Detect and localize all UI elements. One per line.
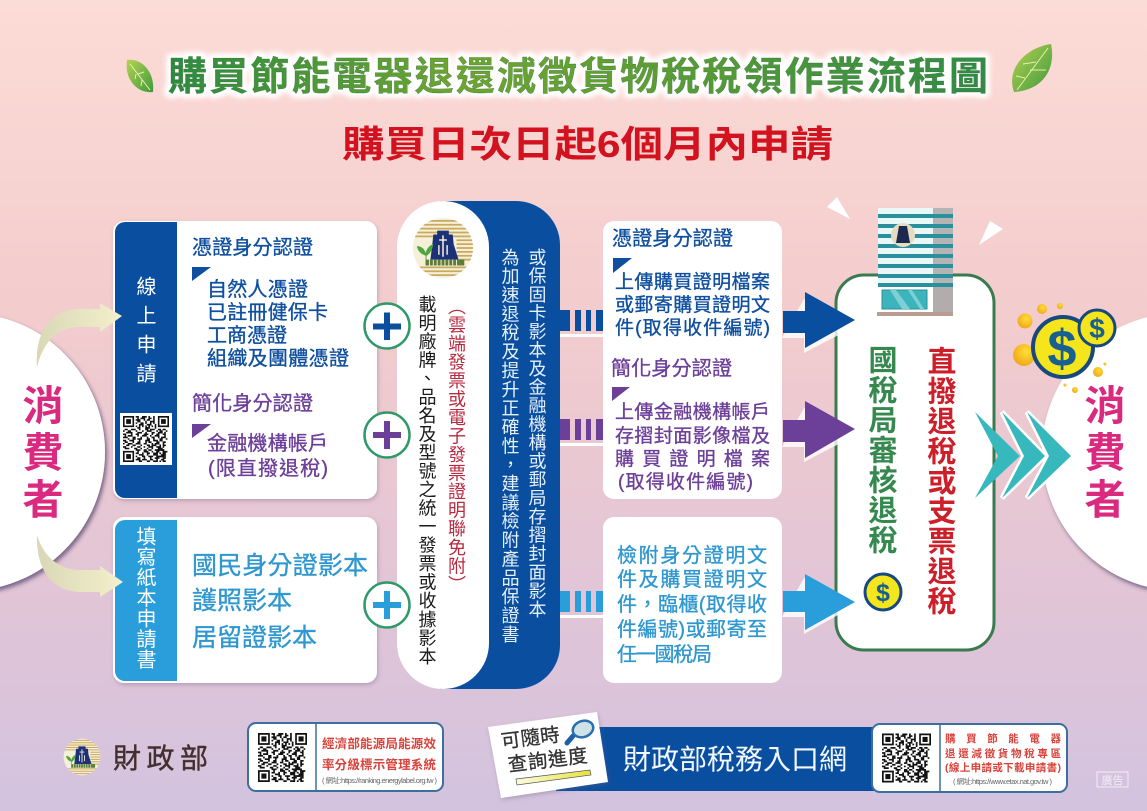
portal zone name [945, 732, 1062, 774]
energy system name: 率分級標示管理系統 [322, 757, 436, 772]
footer: energy label card [248, 723, 443, 791]
portal zone name: (線上申請或下載申請書) [945, 761, 1061, 774]
icon: tax office building [877, 208, 953, 316]
icon: dollar coins and bubbles [1013, 303, 1115, 393]
arrow: blue to bureau [782, 292, 855, 353]
online label: 線上申請 [133, 276, 156, 392]
paper side strip [115, 520, 177, 681]
heading: simplified authentication: 簡化身分認證 [192, 392, 313, 415]
advertisement badge: 廣告 [1102, 773, 1124, 787]
credential upload text: 件(取得收件編號) [615, 317, 770, 339]
credential list [207, 278, 349, 370]
simplified list [207, 432, 328, 480]
counter or mail text: 件及購買證明文 [617, 568, 767, 591]
consumer circle right [1042, 313, 1147, 591]
footer: tax portal bar [556, 727, 886, 791]
consumer circle left [0, 313, 105, 591]
icon: dollar coins and bubbles: $ [1089, 313, 1105, 344]
paper document list: 護照影本 [192, 587, 292, 615]
progress bar [516, 770, 591, 785]
paper label: 填寫紙本申請書 [133, 526, 156, 670]
blue pill [440, 201, 560, 689]
simplified upload text: 購買證明檔案 [615, 448, 770, 470]
portal zone name: 退還減徵貨物稅專區 [945, 747, 1062, 760]
portal URL: ( 網址:https://www.etax.nat.gov.tw ) [953, 776, 1052, 786]
footer: tax portal card [872, 724, 1067, 792]
panel: online application [113, 221, 377, 499]
portal QR code [882, 734, 931, 782]
online QR code [120, 413, 172, 465]
counter or mail text: 件編號)或郵寄至 [617, 618, 767, 641]
panel: attached documents pill [397, 201, 560, 689]
credential list: 工商憑證 [207, 324, 287, 347]
simplified list: (限直撥退稅) [208, 457, 328, 480]
counter or mail text [617, 544, 767, 666]
decorative sparkle right [979, 221, 1003, 245]
dashes: blue connector [560, 310, 604, 337]
arrow: to online application [37, 303, 122, 367]
icon: ministry emblem [413, 218, 473, 278]
dashes: light blue connector [560, 591, 604, 618]
sticky note text: 查詢進度 [507, 745, 589, 777]
ministry name: 財政部 [113, 743, 208, 774]
counter or mail text: 檢附身分證明文 [617, 544, 767, 567]
paper document list [192, 552, 368, 652]
icon: small dollar coin [865, 574, 901, 610]
credential upload text [615, 271, 770, 339]
advertisement badge [1097, 772, 1128, 787]
icon: dollar coins and bubbles: $ [1048, 320, 1077, 378]
panel: counter or mail [603, 517, 782, 683]
arrow: light blue to bureau [782, 574, 855, 634]
energy QR code [258, 733, 307, 782]
refund method text: 直撥退稅或支票退稅 [923, 346, 956, 616]
plus circle 2 [364, 412, 410, 458]
plus circle 3 [364, 582, 410, 628]
counter or mail text: 件，臨櫃(取得收 [617, 593, 767, 616]
heading: simplified authentication: 簡化身分認證 [611, 357, 732, 380]
bureau review text: 國稅局審核退稅 [864, 345, 898, 555]
footer: ministry of finance logo [64, 739, 208, 775]
simplified corner mark [612, 387, 630, 401]
simplified upload text: (取得收件編號) [618, 471, 753, 493]
credential upload text: 或郵寄購買證明文 [615, 294, 770, 316]
plus circle 1 [364, 304, 410, 348]
energy system name: 經濟部能源局能源效 [322, 736, 436, 751]
title text: 購買節能電器退還減徵貨物稅稅領作業流程圖 [168, 56, 988, 99]
credential corner mark [192, 267, 211, 281]
panel: national taxation bureau [836, 275, 994, 650]
icon: small dollar coin: $ [876, 579, 890, 607]
arrow: purple to bureau [782, 401, 855, 462]
white pill [397, 201, 489, 689]
sticky note: check progress [488, 712, 608, 798]
consumer label right: 消費者 [1078, 384, 1126, 525]
energy system name [322, 736, 436, 772]
accelerate refund text: 為加速退稅及提升正確性，建議檢附產品保證書 [500, 248, 520, 643]
paper document list: 居留證影本 [192, 624, 317, 652]
credential corner mark [613, 258, 632, 273]
simplified list: 金融機構帳戶 [207, 432, 328, 455]
panel: paper application [113, 517, 377, 683]
sticky note text [500, 721, 589, 777]
sticky note text: 可隨時 [500, 724, 561, 753]
subtitle: 購買日次日起6個月內申請 [342, 124, 833, 165]
online side strip [115, 222, 177, 498]
credential list: 組織及團體憑證 [207, 347, 349, 370]
credential upload text: 上傳購買證明檔案 [615, 271, 770, 293]
dashes: purple connector [560, 419, 604, 446]
icon: right leaf [1012, 44, 1052, 92]
icon: left leaf [127, 60, 153, 92]
simplified upload text: 存摺封面影像檔及 [615, 425, 770, 447]
energy URL: ( 網址:https://ranking.energylabel.org.tw ) [322, 775, 438, 785]
arrow: to paper application [37, 535, 123, 597]
invoice text: 載明廠牌、品名及型號之統一發票或收據影本 [416, 295, 436, 665]
guarantee card text: 或保固卡影本及金融機構或郵局存摺封面影本 [526, 248, 546, 618]
simplified corner mark [192, 424, 211, 438]
portal name: 財政部稅務入口網 [623, 744, 847, 775]
heading: credential authentication: 憑證身分認證 [612, 227, 733, 250]
heading: credential authentication: 憑證身分認證 [192, 236, 313, 259]
icon: ministry emblem small [64, 739, 100, 775]
credential list: 已註冊健保卡 [207, 301, 328, 324]
consumer label left: 消費者 [16, 384, 64, 525]
arrow: triple chevron [975, 412, 1071, 498]
paper document list: 國民身分證影本 [192, 552, 368, 580]
e-invoice note: （雲端發票或電子發票證明聯免附） [446, 297, 466, 593]
simplified upload text: 上傳金融機構帳戶 [615, 401, 770, 423]
title [127, 44, 1052, 99]
icon: magnifier [567, 718, 596, 743]
credential list: 自然人憑證 [207, 278, 308, 301]
simplified upload text [615, 401, 770, 493]
decorative sparkle left [827, 197, 850, 219]
panel: upload documents [603, 221, 782, 499]
portal zone name: 購買節能電器 [945, 732, 1062, 745]
counter or mail text: 任一國稅局 [617, 643, 712, 666]
